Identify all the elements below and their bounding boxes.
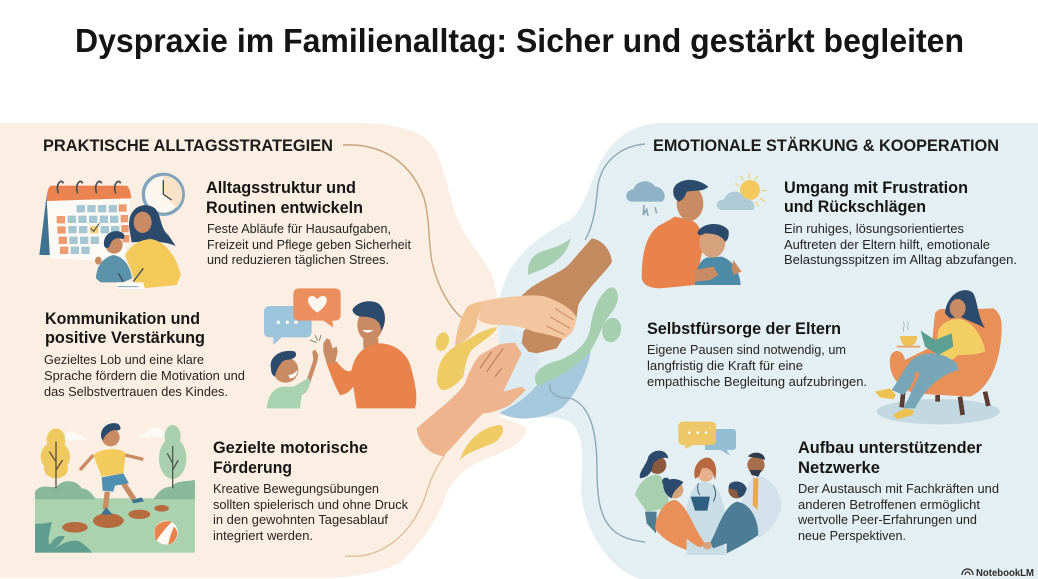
person: father	[642, 180, 708, 288]
text block: Netzwerke: neue Perspektiven.	[798, 529, 906, 543]
hand: lower hand	[417, 343, 526, 456]
text block: Förderung: integriert werden.	[213, 529, 313, 543]
hands	[703, 542, 712, 549]
icon: sun cloud	[717, 192, 754, 210]
icon: calendar stand	[39, 195, 56, 255]
illustration: father comforting child	[626, 173, 767, 288]
shape: pale centre	[500, 327, 540, 403]
illustration: joined hands	[417, 238, 623, 460]
panel: left background	[0, 123, 527, 578]
paper and pencils	[116, 268, 145, 289]
tree: yellow	[41, 428, 70, 488]
text block: Förderung: Kreative Bewegungsübungen	[213, 482, 379, 496]
shape: green leaf	[528, 238, 571, 275]
person: child	[95, 231, 132, 282]
text block: Frustration: Auftreten der Eltern hilft, emotionale	[784, 238, 990, 252]
text block: Förderung: in den gewohnten Tagesablauf	[213, 513, 389, 527]
shadow	[877, 399, 1000, 424]
shape: small yellow oval	[434, 331, 451, 353]
ground	[35, 498, 195, 553]
title: Dyspraxie im Familienalltag: Sicher und gestärkt begleiten	[75, 22, 964, 59]
shape: green band	[535, 287, 618, 386]
text block: Netzwerke: anderen Betroffenen ermöglicht	[798, 498, 981, 512]
text block: Alltagsstruktur: und reduzieren täglichen Strees.	[207, 253, 389, 267]
connector: bottom left curve	[345, 455, 445, 556]
text block: Förderung: sollten spielerisch und ohne Druck	[213, 498, 409, 512]
heading: right section: EMOTIONALE STÄRKUNG & KOOPERATION	[653, 137, 999, 155]
text block: Frustration: und Rückschlägen	[784, 198, 926, 216]
person: woman left	[635, 451, 669, 533]
finger lines: peach hand	[547, 308, 573, 335]
text block: Förderung: Förderung	[213, 459, 292, 477]
text block: Netzwerke: wertvolle Peer-Erfahrungen und	[797, 513, 977, 527]
person: woman in orange	[655, 478, 705, 550]
person: child	[80, 423, 144, 515]
shape: tan sleeve	[455, 300, 487, 347]
text block: Kommunikation: positive Verstärkung	[45, 329, 205, 347]
text block: Selbstfürsorge: Selbstfürsorge der Eltern	[647, 320, 841, 338]
icon: rain cloud	[626, 181, 665, 216]
icon: calendar rings	[57, 181, 121, 193]
shape: green oval	[600, 316, 623, 344]
text block: Frustration: Ein ruhiges, lösungsorientiertes	[784, 222, 964, 236]
icon: calendar check cell	[90, 223, 99, 233]
icon: calendar blue cells	[68, 205, 119, 254]
person: reading parent	[875, 290, 985, 419]
text block: Förderung: Gezielte motorische	[213, 439, 368, 457]
text block: Alltagsstruktur: Feste Abläufe für Hausaufgaben,	[207, 222, 391, 236]
text block: Netzwerke: Aufbau unterstützender	[798, 439, 983, 457]
stumps	[62, 505, 169, 533]
text block: Kommunikation	[44, 310, 245, 399]
icon: clock	[143, 174, 183, 214]
icon: yellow speech bubble	[678, 422, 716, 449]
shape: yellow drop	[460, 425, 503, 460]
hand: brown upper hand	[517, 238, 612, 353]
text block: Selbstfürsorge: empathische Begleitung aufzubringen.	[647, 375, 867, 389]
icon: calendar orange cells	[57, 204, 129, 254]
icon: beach ball	[154, 521, 178, 545]
connector: top left curve	[343, 145, 462, 318]
illustration: calendar and mother with child	[39, 174, 183, 289]
illustration: support network group	[635, 422, 782, 555]
text block: Kommunikation: Gezieltes Lob und eine klare	[44, 353, 204, 367]
line: blue band fold	[550, 383, 570, 398]
icon: open book	[921, 331, 953, 355]
icon: orange speech bubble with heart	[293, 288, 341, 328]
person: mother	[125, 205, 181, 289]
text block: Frustration: Belastungsspitzen im Alltag abzufangen.	[784, 253, 1017, 267]
text block: Netzwerke	[797, 439, 999, 543]
icon: calendar header	[47, 186, 131, 201]
chair legs	[902, 392, 988, 415]
person: child	[695, 224, 741, 285]
icon: blue speech bubble	[705, 429, 736, 456]
text block: Förderung	[213, 439, 409, 543]
bushes	[35, 480, 195, 499]
text block: Frustration	[784, 179, 1017, 267]
finger lines: lower hand	[480, 348, 503, 377]
text block: Netzwerke: Netzwerke	[798, 459, 880, 477]
text block: Selbstfürsorge: Eigene Pausen sind notwendig, um	[647, 343, 846, 357]
text block: Alltagsstruktur: Alltagsstruktur und	[206, 179, 356, 197]
illustration: high five	[264, 288, 416, 408]
shape: blue band	[500, 351, 591, 419]
text block: Alltagsstruktur: Freizeit und Pflege geben Sicherheit	[207, 238, 411, 252]
icon: sun	[735, 173, 767, 207]
text block: Frustration: Umgang mit Frustration	[784, 179, 968, 197]
logo: NotebookLM: NotebookLM	[976, 567, 1034, 579]
shape: yellow blob	[437, 327, 497, 390]
text block: Alltagsstruktur	[206, 179, 411, 267]
high five sparks	[310, 335, 321, 343]
panel: right background	[495, 123, 1038, 579]
icon: calendar page	[47, 198, 130, 262]
text block: Kommunikation: das Selbstvertrauen des Kindes.	[44, 385, 228, 399]
person: child	[267, 349, 318, 408]
text block: Selbstfürsorge	[647, 320, 867, 389]
tree: green	[159, 425, 186, 488]
person: man right	[742, 453, 782, 538]
text block: Kommunikation: Sprache fördern die Motivation und	[44, 369, 245, 383]
hands	[694, 260, 742, 282]
hand: peach middle hand	[478, 295, 577, 339]
connector: top right curve	[585, 144, 645, 240]
icon: blue speech bubble	[264, 306, 312, 345]
icon: tea cup	[897, 322, 920, 347]
text block: Alltagsstruktur: Routinen entwickeln	[206, 199, 363, 217]
plants	[35, 522, 92, 553]
person: man in blue	[710, 481, 758, 553]
heading: left section: PRAKTISCHE ALLTAGSSTRATEGIEN	[43, 137, 333, 155]
illustration: child balancing in park	[35, 423, 195, 553]
illustration: parent reading in armchair	[875, 290, 1002, 424]
clouds	[65, 427, 163, 441]
connector: bottom right curve	[570, 398, 645, 542]
person: doctor	[687, 458, 727, 555]
text block: Netzwerke: Der Austausch mit Fachkräften und	[798, 482, 999, 496]
text block: Kommunikation: Kommunikation und	[45, 310, 200, 328]
text block: Selbstfürsorge: langfristig die Kraft für eine	[647, 359, 803, 373]
person: father	[323, 301, 416, 408]
armchair	[890, 308, 1002, 397]
